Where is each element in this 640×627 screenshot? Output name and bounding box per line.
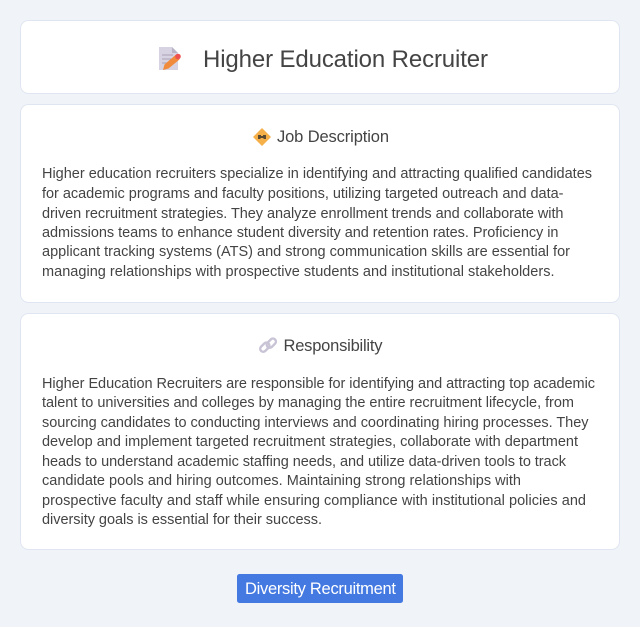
panel: responsibility [20,314,620,550]
heading: responsibility: Responsibility [284,337,383,355]
icon: chain link [259,337,277,353]
tag button [237,574,403,603]
text block: job description [42,166,592,280]
text block: responsibility: prospective faculty and staff while ensuring compliance with institutional policies and [42,493,586,509]
text block: responsibility: develop and implement targeted recruitment strategies, collaborate with department [42,434,578,450]
text block: job description: applicant tracking systems (ATS) and strong communication skills are essential for [42,244,570,260]
text block: responsibility: heads to understand academic staffing needs, and utilize data-driven tools to track [42,454,567,470]
icon: diamond sign [254,129,270,145]
panel: title card [20,20,620,94]
text block: responsibility: candidate pools and hiring outcomes. Maintaining strong relationships with [42,473,521,489]
text block: responsibility: Higher Education Recruiters are responsible for identifying and attracting top academic [42,376,595,392]
tag button: Diversity Recruitment [245,580,396,598]
text block: job description: admissions teams to enhance student diversity and retention rates. Proficiency in [42,225,558,241]
text block: responsibility: diversity goals is essential for their success. [42,512,322,528]
text block: responsibility: sourcing candidates to conducting interviews and coordinating hiring processes. They [42,415,589,431]
text block: responsibility: talent to universities and colleges by managing the entire recruitment lifecycle, from [42,395,574,411]
icon: document with pencil [159,47,181,70]
title: Higher Education Recruiter [203,46,488,73]
text block: responsibility [42,376,595,528]
heading: job description: Job Description [277,128,389,146]
text block: job description: driven recruitment strategies. They analyze enrollment trends and collaborate with [42,206,564,222]
text block: job description: managing relationships with prospective students and institutional stakeholders. [42,264,554,280]
text block: job description: Higher education recruiters specialize in identifying and attracting qualified candidates [42,166,592,182]
panel: job description [20,104,620,302]
text block: job description: for academic programs and faculty positions, utilizing targeted outreach and data- [42,186,564,202]
